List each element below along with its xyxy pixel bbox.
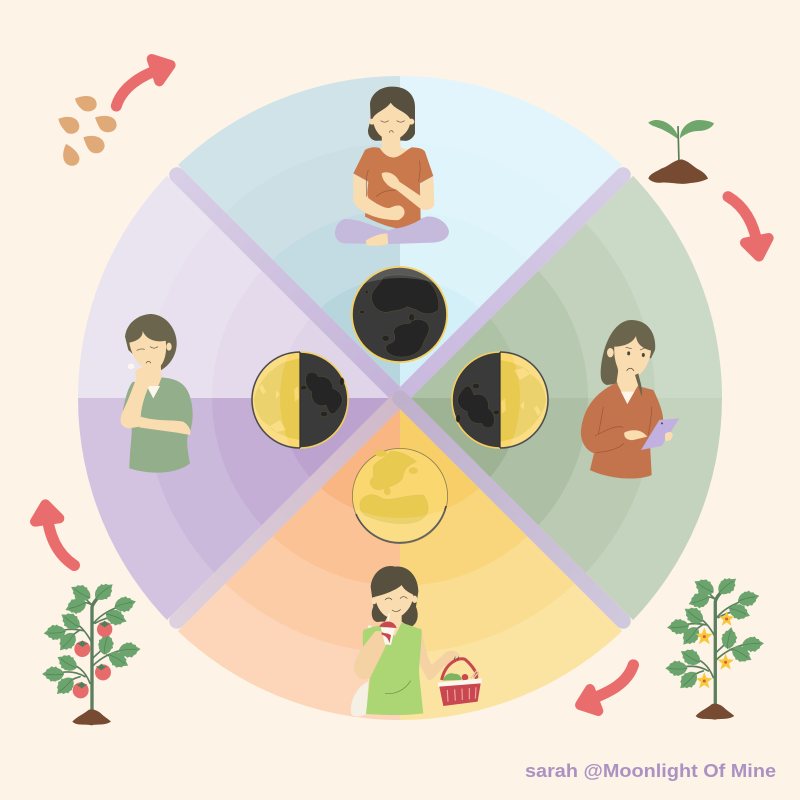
hair lock <box>635 373 642 397</box>
tomatoes <box>73 622 112 698</box>
legs <box>335 216 449 244</box>
arms <box>121 375 153 428</box>
sector: new moon, blue, right half <box>400 76 622 387</box>
hair <box>601 320 655 385</box>
arrow: flowering plant to fruiting plant <box>580 665 633 711</box>
diagonal dividers <box>177 175 623 621</box>
sector: left, purple, lower half <box>78 398 389 620</box>
face <box>129 331 166 370</box>
sector: new moon, blue, left half <box>178 76 400 387</box>
credit text: sarah @Moonlight Of Mine <box>525 760 776 781</box>
arrow: fruiting plant to seeds <box>35 504 74 565</box>
neck <box>378 133 408 160</box>
flowers <box>696 611 734 688</box>
hands <box>665 432 673 441</box>
sweater <box>581 383 663 479</box>
icon: seeds <box>58 96 117 166</box>
icon: fruiting tomato plant <box>42 579 141 725</box>
hair <box>368 87 415 141</box>
face <box>373 103 411 140</box>
basket <box>438 659 482 706</box>
sleeve folds <box>595 407 652 453</box>
arrow: seeds to sprout <box>116 59 171 106</box>
left arm <box>354 631 388 680</box>
breath puff <box>128 364 134 369</box>
face <box>614 336 651 378</box>
shirt <box>122 377 193 473</box>
collar <box>621 392 634 404</box>
new moon <box>352 267 447 362</box>
tablet <box>641 418 679 450</box>
full moon <box>352 448 448 544</box>
arrow: sprout to flowering plant <box>728 197 769 257</box>
foot <box>366 233 388 246</box>
waning half moon, right <box>452 352 548 448</box>
drink cup <box>379 613 397 645</box>
fingers on handle <box>454 657 459 660</box>
shopping bag <box>351 625 372 716</box>
pale ring veil over the moons <box>252 267 548 544</box>
shirt <box>353 147 433 228</box>
sector: left, purple, upper half <box>78 176 389 398</box>
icon: flowering tomato plant <box>665 573 765 720</box>
sector: full moon, orange half <box>178 409 400 720</box>
sector: right, green, lower half <box>411 398 722 620</box>
person: meditating, top <box>335 87 449 246</box>
collar <box>147 386 160 398</box>
fist <box>135 367 154 381</box>
neck <box>617 370 638 404</box>
sector: full moon, yellow half <box>400 409 622 720</box>
right arm <box>418 630 460 680</box>
sector: right, green, upper half <box>411 176 722 398</box>
moon phase wheel <box>78 76 722 720</box>
neck <box>143 363 162 398</box>
person: with tablet, right <box>581 320 679 479</box>
dress <box>363 623 423 715</box>
waxing half moon, left <box>252 352 348 448</box>
arms and hands <box>353 174 405 220</box>
face <box>375 585 413 618</box>
person: eating with basket, bottom <box>351 566 482 716</box>
hair <box>125 314 177 371</box>
hair <box>371 566 418 627</box>
icon: sprout <box>648 120 714 184</box>
neck <box>383 615 402 636</box>
person: thinking, left <box>121 314 193 473</box>
